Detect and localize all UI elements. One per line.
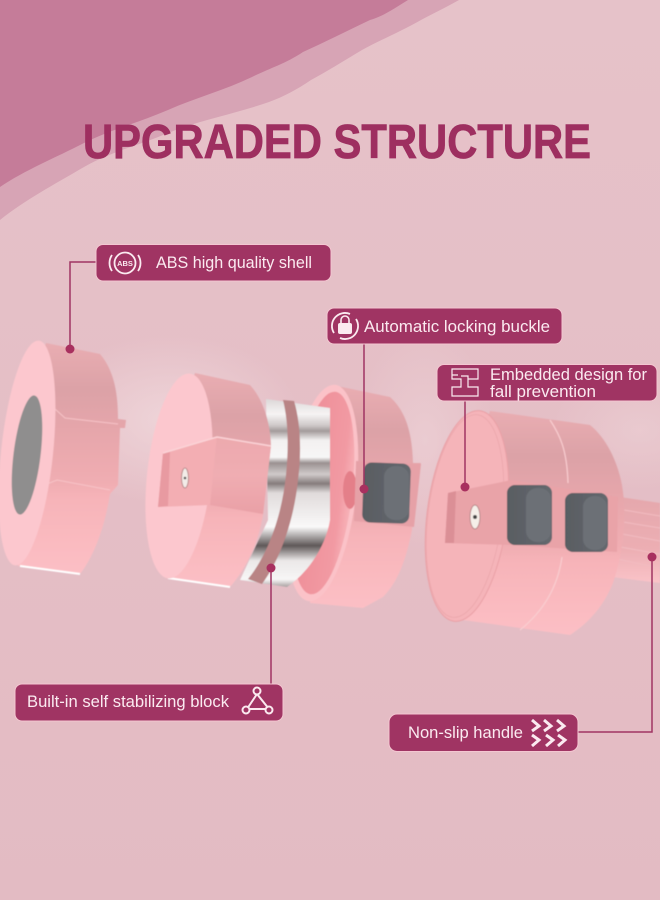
icon: triangle nodes: [242, 688, 272, 714]
grey buckle 1: [507, 485, 552, 545]
grey buckle 2: [565, 493, 608, 552]
callout: Automatic locking buckle: [327, 308, 562, 494]
slot pocket: [158, 437, 217, 507]
seams: [520, 420, 568, 630]
end cap side wall: [14, 343, 126, 574]
callout: ABS high quality shell: [66, 244, 331, 354]
cup interior: [282, 388, 364, 598]
callout: Embedded design for fall prevention: fall prevention: [490, 383, 596, 401]
background wave: dark band: [0, 0, 408, 187]
front face: [136, 370, 222, 582]
handle cap side wall: [460, 411, 624, 635]
disc 1: ABS end cap: [0, 338, 126, 574]
callout: Embedded design for fall prevention: [437, 364, 657, 492]
callout: Automatic locking buckle: Automatic locking buckle: [364, 318, 550, 336]
front face: [414, 406, 520, 626]
callout: Built-in self stabilizing block: Built-in self stabilizing block: [27, 693, 230, 711]
product illustration: [0, 338, 660, 635]
centre hub: [343, 471, 357, 509]
slot: [445, 480, 618, 552]
icon: lock: [332, 313, 358, 339]
callout: Non-slip handle: Non-slip handle: [408, 724, 523, 742]
callout: Built-in self stabilizing block: [15, 564, 283, 721]
disc 3: open cup: [275, 381, 421, 608]
callout: ABS high quality shell: ABS high quality shell: [156, 254, 312, 272]
slotted cap side wall: [165, 373, 271, 587]
title: UPGRADED STRUCTURE: [83, 116, 591, 169]
grey window: [6, 394, 48, 516]
screw: [182, 468, 188, 488]
slot band: [210, 437, 271, 514]
handle: [612, 497, 660, 583]
icon: chevrons: [532, 720, 565, 746]
callout: Non-slip handle: [389, 552, 656, 752]
disc 4: handle end cap: [414, 406, 624, 635]
buckle slot: [354, 461, 421, 527]
icon: ABS: ABS: [117, 259, 133, 268]
background wave: light band: [0, 0, 459, 220]
icon: embedded joint: [452, 369, 478, 396]
screw: [470, 505, 480, 529]
callout: Embedded design for fall prevention: Embedded design for: [490, 366, 648, 384]
grey locking buckle: [362, 462, 411, 524]
cup side wall: [310, 386, 421, 608]
disc 2: slotted cap: [136, 370, 271, 587]
icon: ABS: [109, 252, 141, 274]
metal weight cylinder: [240, 399, 330, 587]
cup rim: [275, 381, 369, 605]
front face: [0, 338, 65, 568]
stabilizing ring: [248, 400, 300, 584]
